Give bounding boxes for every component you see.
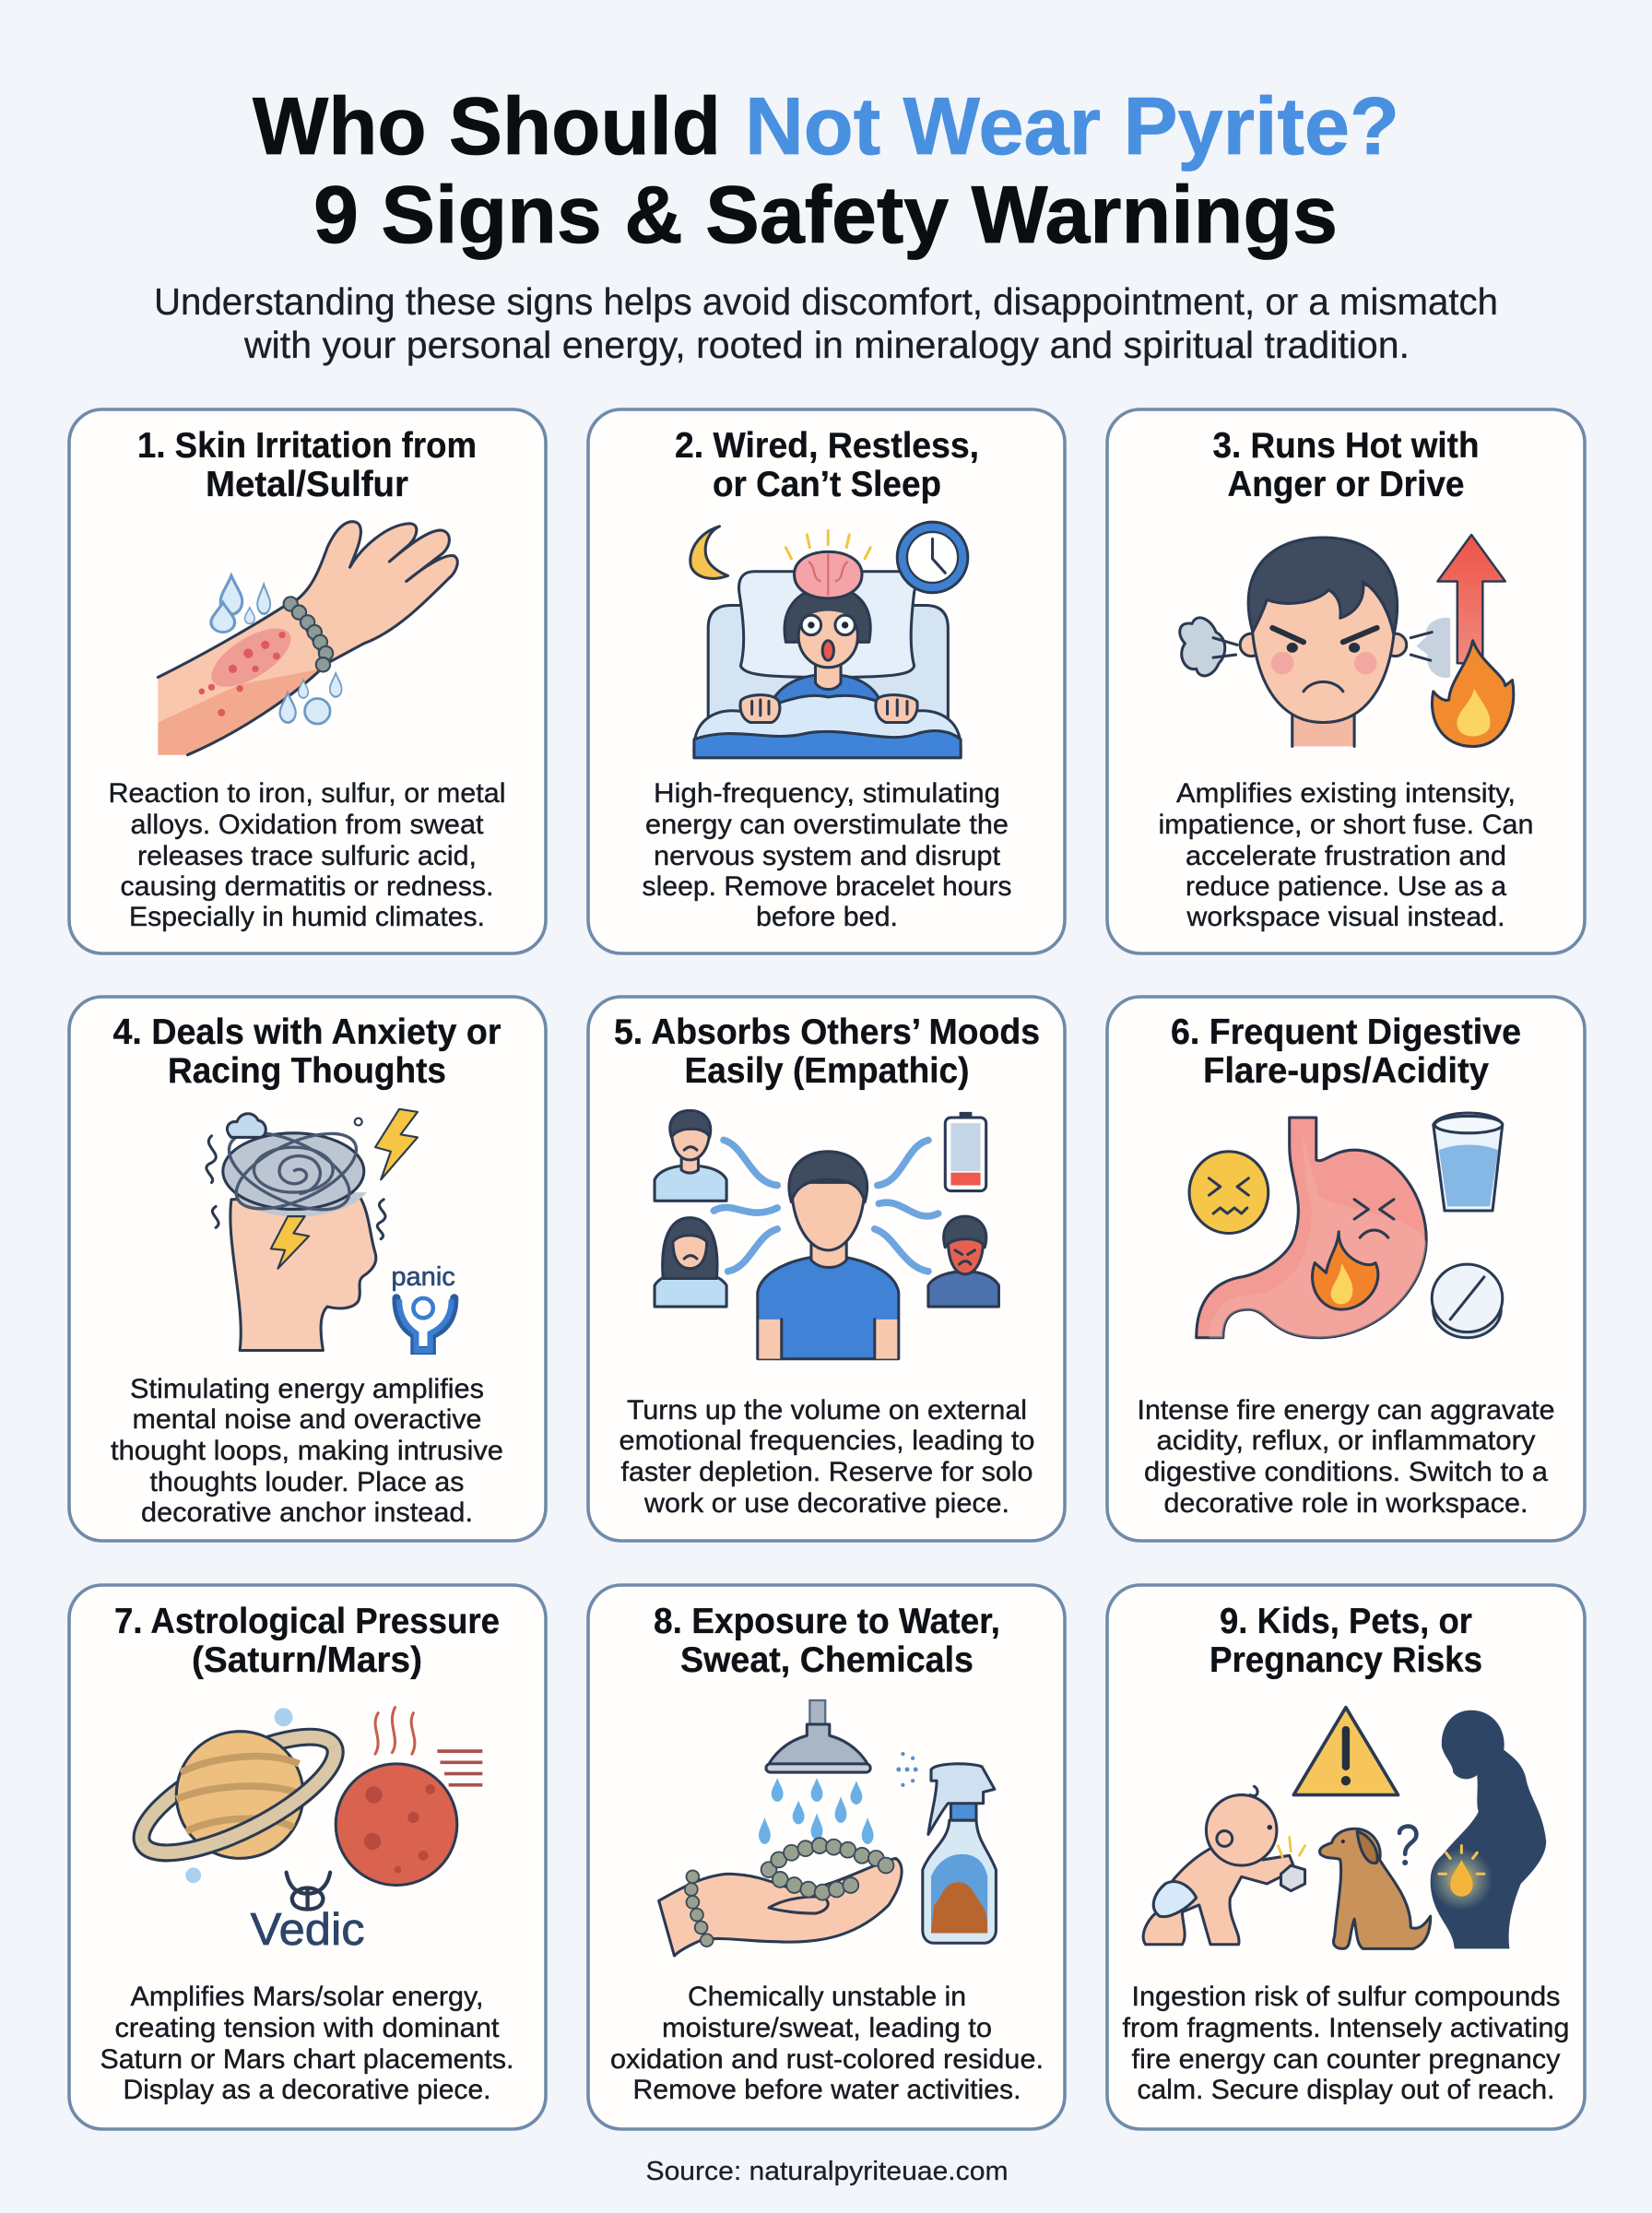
heading 4: 4. Deals with Anxiety or (112, 1012, 502, 1052)
body 5: faster depletion. Reserve for solo (621, 1457, 1032, 1487)
panel: 2 wired restless (588, 409, 1065, 953)
body 4: Stimulating energy amplifies (130, 1374, 484, 1404)
heading 6: Flare-ups/Acidity (1203, 1051, 1490, 1091)
body 5 (620, 1395, 1034, 1519)
heading 2 (675, 426, 979, 504)
heading 1: Metal/Sulfur (206, 465, 408, 504)
icon: inflamed stomach, face, water, pill (1189, 1113, 1503, 1338)
body 4 (111, 1374, 503, 1528)
title (253, 80, 1399, 260)
body 7: Saturn or Mars chart placements. (100, 2044, 514, 2075)
body 1: Especially in humid climates. (129, 902, 485, 932)
icon: empath surrounded by moods (655, 1110, 998, 1359)
body 1: causing dermatitis or redness. (120, 871, 494, 902)
body 5: work or use decorative piece. (643, 1488, 1009, 1519)
body 2: before bed. (756, 902, 898, 932)
panel: 4 anxiety (69, 997, 546, 1541)
body 4: thoughts louder. Place as (149, 1467, 465, 1497)
icon: warning, baby, dog, pregnant silhouette (1143, 1708, 1546, 1948)
heading 8: 8. Exposure to Water, (654, 1602, 1000, 1641)
body 1 (109, 778, 505, 932)
heading 9: 9. Kids, Pets, or (1220, 1602, 1472, 1641)
heading 7: (Saturn/Mars) (192, 1640, 422, 1680)
body 3: impatience, or short fuse. Can (1158, 810, 1534, 840)
panel: 6 digestive (1107, 997, 1585, 1541)
body 4: thought loops, making intrusive (111, 1436, 503, 1466)
body 3 (1158, 778, 1534, 932)
body 2: energy can overstimulate the (645, 810, 1009, 840)
body 1: Reaction to iron, sulfur, or metal (109, 778, 505, 809)
heading 2: or Can’t Sleep (713, 465, 941, 504)
icon: arm with rash and bracelet (158, 522, 457, 755)
icon: Saturn, Mars and Vedic symbol (127, 1708, 482, 1955)
body 5: Turns up the volume on external (627, 1395, 1027, 1426)
body 5: emotional frequencies, leading to (620, 1426, 1034, 1456)
body 1: releases trace sulfuric acid, (137, 841, 477, 871)
body 2: nervous system and disrupt (654, 841, 1001, 871)
body 7: Amplifies Mars/solar energy, (131, 1982, 483, 2012)
heading 3 (1213, 426, 1479, 504)
icon: angry face with steam, arrow and flame (1180, 535, 1514, 747)
heading 9 (1210, 1602, 1482, 1680)
heading 1 (137, 426, 477, 504)
panel: 5 empathic (588, 997, 1065, 1541)
body 1: alloys. Oxidation from sweat (131, 810, 484, 840)
heading 7 (114, 1602, 500, 1680)
body 7 (100, 1982, 514, 2105)
body 4: decorative anchor instead. (141, 1497, 473, 1528)
heading 8 (654, 1602, 1000, 1680)
body 2 (642, 778, 1012, 932)
title: Who Should (253, 80, 721, 172)
body 3: Amplifies existing intensity, (1176, 778, 1516, 809)
heading 1: 1. Skin Irritation from (137, 426, 477, 466)
body 3: reduce patience. Use as a (1186, 871, 1506, 902)
subtitle: Understanding these signs helps avoid discomfort, disappointment, or a mismatch (154, 280, 1498, 323)
body 2: sleep. Remove bracelet hours (642, 871, 1012, 902)
body 2: High-frequency, stimulating (654, 778, 1000, 809)
body 3: workspace visual instead. (1186, 902, 1504, 932)
panel: 7 astrological (69, 1585, 546, 2129)
heading 7: 7. Astrological Pressure (114, 1602, 500, 1641)
body 8 (610, 1982, 1044, 2105)
heading 9: Pregnancy Risks (1210, 1640, 1482, 1680)
body 4: mental noise and overactive (133, 1404, 481, 1435)
body 3: accelerate frustration and (1186, 841, 1506, 871)
person: sad bottom left (655, 1218, 726, 1307)
heading 6 (1171, 1012, 1521, 1091)
icon: Saturn, Mars and Vedic symbol: Vedic (251, 1905, 365, 1955)
heading 6: 6. Frequent Digestive (1171, 1012, 1521, 1052)
body 9 (1123, 1982, 1569, 2105)
body 9: Ingestion risk of sulfur compounds (1132, 1982, 1560, 2012)
body 8: Remove before water activities. (632, 2075, 1021, 2105)
body 9: calm. Secure display out of reach. (1138, 2075, 1554, 2105)
heading 3: Anger or Drive (1228, 465, 1464, 504)
subtitle: with your personal energy, rooted in mineralogy and spiritual tradition. (243, 324, 1410, 366)
body 6: acidity, reflux, or inflammatory (1156, 1426, 1536, 1456)
source footer: Source: naturalpyriteuae.com (645, 2157, 1009, 2186)
panel: 8 water sweat chemicals (588, 1585, 1065, 2129)
title: Not Wear Pyrite? (745, 80, 1399, 172)
icon: head with swirling thoughts (206, 1109, 455, 1350)
heading 5: Easily (Empathic) (684, 1051, 970, 1091)
icon: head with swirling thoughts: panic (391, 1262, 455, 1292)
heading 8: Sweat, Chemicals (680, 1640, 974, 1680)
body 6: digestive conditions. Switch to a (1144, 1457, 1548, 1487)
heading 4: Racing Thoughts (168, 1051, 446, 1091)
body 6: Intense fire energy can aggravate (1138, 1395, 1554, 1426)
body 9: from fragments. Intensely activating (1123, 2013, 1569, 2043)
body 8: moisture/sweat, leading to (662, 2013, 992, 2043)
body 7: Display as a decorative piece. (124, 2075, 490, 2105)
icon: awake person in bed (690, 522, 968, 758)
body 6: decorative role in workspace. (1163, 1488, 1528, 1519)
panel: 9 kids pets pregnancy (1107, 1585, 1585, 2129)
title: 9 Signs & Safety Warnings (313, 169, 1338, 260)
battery low (945, 1112, 986, 1191)
person: angry bottom right (928, 1216, 998, 1307)
body 8: oxidation and rust-colored residue. (610, 2044, 1044, 2075)
panel: 1 skin irritation (69, 409, 546, 953)
heading 2: 2. Wired, Restless, (675, 426, 979, 466)
icon: shower, hand with beads, spray bottle (659, 1700, 996, 1956)
panel: 3 runs hot (1107, 409, 1585, 953)
body 9: fire energy can counter pregnancy (1132, 2044, 1560, 2075)
body 8: Chemically unstable in (688, 1982, 966, 2012)
heading 5 (614, 1012, 1040, 1091)
person: sad top left (655, 1110, 726, 1201)
subtitle (154, 280, 1498, 366)
heading 4 (112, 1012, 502, 1091)
body 7: creating tension with dominant (114, 2013, 500, 2043)
body 6 (1138, 1395, 1554, 1519)
heading 5: 5. Absorbs Others’ Moods (614, 1012, 1040, 1052)
heading 3: 3. Runs Hot with (1213, 426, 1479, 466)
